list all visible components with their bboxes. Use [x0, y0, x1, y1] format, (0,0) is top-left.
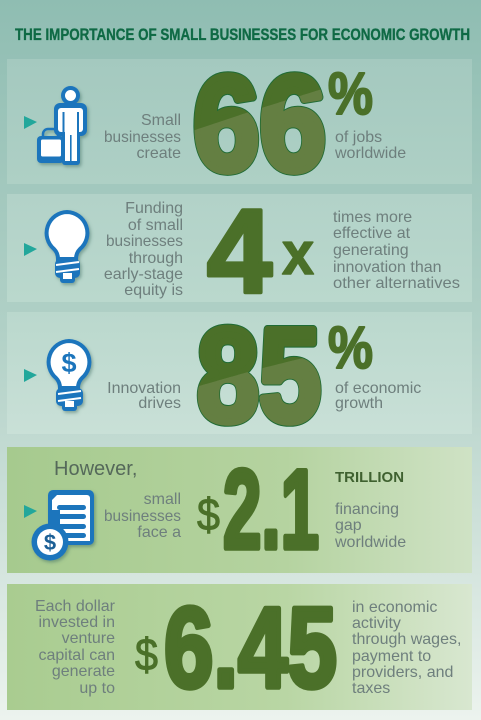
figure: 2.1: 2.1: [223, 447, 319, 572]
multiplier x: x: [282, 220, 314, 287]
panel: 4x innovation: [7, 185, 472, 318]
text: funding of small businesses: [104, 200, 183, 299]
text: in economic activity: through wages,: [352, 631, 461, 648]
text: each dollar invested: up to: [79, 680, 115, 697]
text: each dollar invested: capital can: [38, 647, 115, 664]
figure: 85: 85: [197, 302, 321, 450]
text: innovation drives: Innovation: [107, 380, 181, 397]
figure: 85: [196, 324, 322, 427]
panel: venture capital return: [7, 584, 472, 712]
text: of jobs worldwide: worldwide: [334, 145, 406, 162]
arrow marker: [24, 243, 37, 256]
text: small businesses create: [104, 112, 181, 162]
panel: 66% of jobs: [7, 59, 472, 184]
text: in economic activity: activity: [352, 615, 401, 632]
icon: document with dollar coin: [32, 490, 94, 560]
text: financing gap worldwide: worldwide: [334, 534, 406, 551]
text: funding of small businesses: Funding: [125, 200, 183, 217]
text: times more effective: innovation than: [333, 259, 442, 276]
label: trillion: TRILLION: [335, 469, 404, 486]
text: times more effective: other alternatives: [333, 275, 460, 292]
text: small businesses create: businesses: [104, 129, 181, 146]
text: of economic growth: [335, 380, 421, 412]
text: in economic activity: [352, 599, 461, 697]
text: funding of small businesses: through: [129, 250, 183, 267]
icon: light bulb: [47, 212, 87, 283]
text: in economic activity: payment to: [352, 648, 431, 665]
icon: dollar light bulb: [49, 341, 89, 411]
figure: 66: 66: [193, 48, 326, 199]
text: small businesses create: Small: [141, 112, 181, 129]
icon: document with dollar coin: $: [44, 530, 56, 555]
dollar sign: $: [197, 489, 220, 540]
arrow marker: [24, 505, 37, 518]
percent sign: %: [328, 61, 373, 127]
text: small businesses face a: [104, 491, 181, 541]
text: funding of small businesses: early-stage: [104, 266, 183, 283]
text: of jobs worldwide: of jobs: [335, 129, 382, 146]
text: times more effective: effective at: [333, 225, 411, 242]
icon: dollar light bulb: $: [61, 348, 77, 378]
text: financing gap worldwide: gap: [335, 517, 362, 534]
panel: 85% of economic growth: [7, 312, 472, 434]
text: each dollar invested: venture: [62, 630, 115, 647]
figure: 85: 85: [197, 302, 321, 450]
text: innovation drives: [107, 380, 181, 412]
panel: financing gap: [7, 447, 472, 573]
figure: 66: 66: [193, 48, 326, 199]
text: small businesses face a: small: [144, 491, 181, 508]
figure: 85: 85: [197, 302, 321, 450]
text: funding of small businesses: of small: [128, 217, 183, 234]
icon: person with briefcase: [37, 86, 87, 165]
text: each dollar invested: generate: [52, 663, 115, 680]
text: in economic activity: providers, and: [352, 664, 453, 681]
text: of economic growth: growth: [335, 395, 383, 412]
text: in economic activity: taxes: [352, 680, 390, 697]
text: each dollar invested: [35, 598, 116, 697]
text: times more effective: generating: [333, 242, 409, 259]
dollar sign: $: [135, 629, 158, 680]
text: innovation drives: drives: [138, 395, 181, 412]
text: funding of small businesses: equity is: [124, 282, 183, 299]
heading: however: However,: [54, 458, 137, 480]
text: times more effective: times more: [333, 209, 412, 226]
text: small businesses face a: businesses: [104, 508, 181, 525]
figure: 4: 4: [207, 185, 272, 318]
figure: 66: [193, 71, 326, 176]
arrow marker: [24, 116, 37, 129]
text: financing gap worldwide: financing: [335, 501, 399, 518]
text: of jobs worldwide: [334, 129, 406, 162]
text: in economic activity: in economic: [352, 599, 437, 616]
arrow marker: [24, 369, 37, 382]
text: times more effective: [333, 209, 460, 292]
text: of economic growth: of economic: [335, 380, 421, 397]
text: small businesses create: create: [137, 145, 181, 162]
text: financing gap worldwide: [334, 501, 406, 551]
figure: 66: 66: [193, 48, 326, 199]
text: funding of small businesses: businesses: [106, 233, 183, 250]
figure: 6.45: 6.45: [164, 585, 337, 712]
text: small businesses face a: face a: [137, 524, 181, 541]
text: each dollar invested: invested in: [38, 614, 115, 631]
percent sign: %: [328, 315, 373, 381]
text: each dollar invested: Each dollar: [35, 598, 116, 615]
